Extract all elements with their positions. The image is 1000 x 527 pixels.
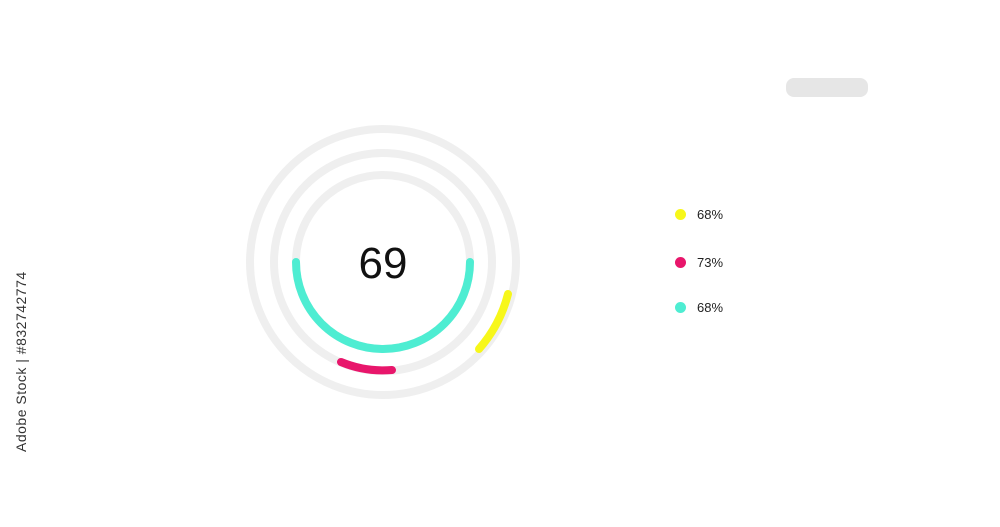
- legend: yellow: [675, 207, 723, 222]
- legend: cyan: [675, 300, 723, 315]
- legend: red: 73%: [697, 255, 723, 270]
- legend: red: [675, 255, 723, 270]
- side credit text: Adobe Stock | #832742774: [13, 271, 29, 452]
- legend: yellow: 68%: [697, 207, 723, 222]
- pill placeholder: [786, 78, 868, 97]
- arc: yellow: [479, 294, 508, 349]
- arc: red: [341, 362, 392, 370]
- legend: cyan: 68%: [697, 300, 723, 315]
- center value: 69: [359, 239, 407, 288]
- arc: cyan: [296, 262, 470, 349]
